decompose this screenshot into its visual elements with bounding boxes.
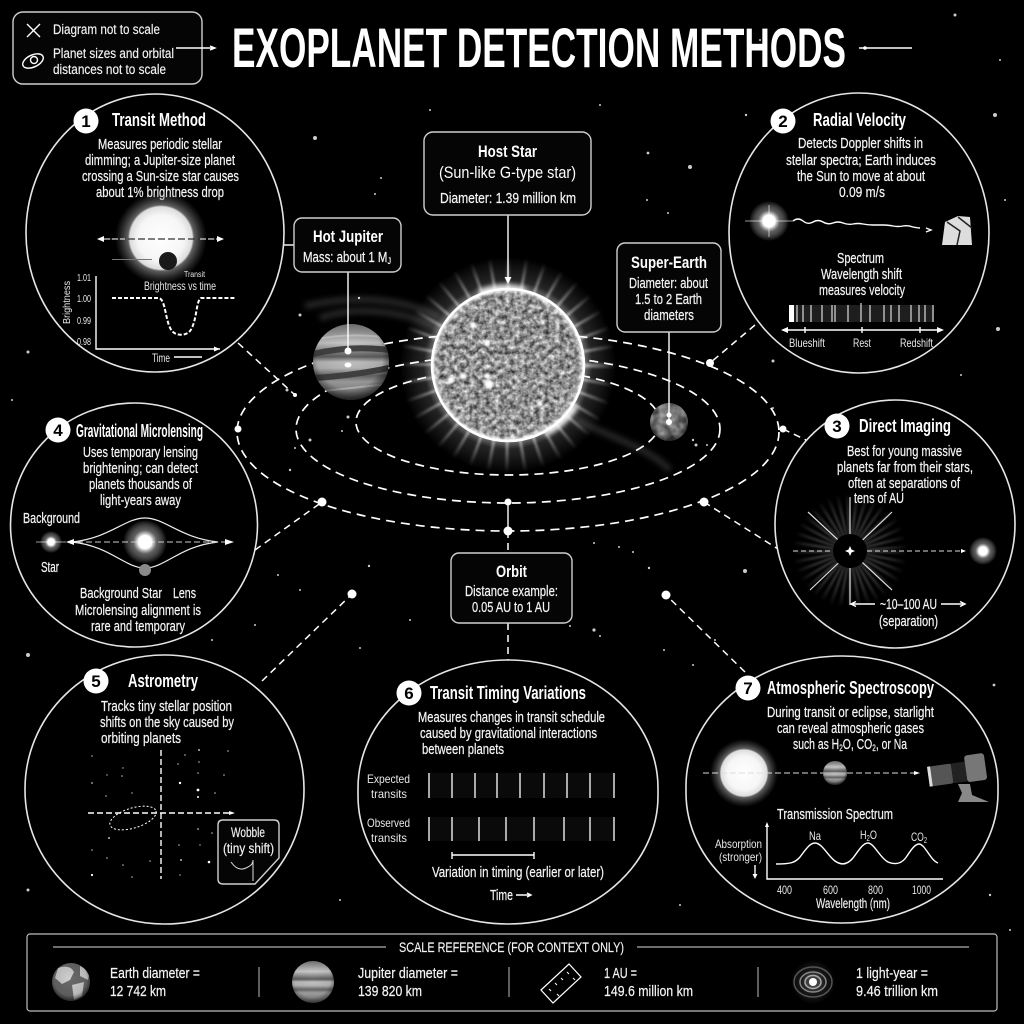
description: Detects Doppler shifts in <box>798 136 923 152</box>
description: planets thousands of <box>89 477 193 493</box>
description <box>786 136 936 201</box>
description: often at separations of <box>848 476 961 492</box>
transmission spectrum chart: CO <box>911 830 929 844</box>
transmission spectrum chart: H <box>860 828 869 842</box>
description: brightening; can detect <box>83 461 198 477</box>
description: about 1% brightness drop <box>96 185 224 201</box>
description: Measures changes in transit schedule <box>418 710 605 726</box>
wavelength axis <box>781 327 944 350</box>
description: planets far from their stars, <box>837 460 973 476</box>
wobble callout: (tiny shift) <box>223 841 274 856</box>
description: crossing a Sun-size star causes <box>82 169 239 185</box>
transmission spectrum chart: 2 <box>924 836 927 845</box>
wobble callout <box>218 820 279 884</box>
transmission spectrum chart: Wavelength (nm) <box>816 896 890 911</box>
arrow: legend to title <box>176 46 215 50</box>
separation label: ~10–100 AU <box>880 597 937 613</box>
description <box>82 137 239 201</box>
transmission spectrum chart: 400 <box>777 883 792 897</box>
callout: hot jupiter: Mass: about 1 M <box>303 250 410 266</box>
callout: super-earth <box>617 243 721 332</box>
legend line 1: Diagram not to scale <box>53 22 160 37</box>
orbit ellipses <box>237 333 779 531</box>
badge 7: 7 <box>743 679 753 698</box>
wave arrow <box>793 219 931 232</box>
spectrum text: measures velocity <box>819 283 906 299</box>
light-year: 1 light-year = <box>856 966 928 982</box>
description: O, CO <box>843 737 872 753</box>
description: 0.09 m/s <box>839 185 885 201</box>
wavelength axis: Blueshift <box>789 336 826 350</box>
light curve chart: 1.01 <box>77 273 91 284</box>
badge 4 <box>46 418 70 442</box>
legend line 3: distances not to scale <box>53 62 166 77</box>
coronagraph star <box>793 497 966 605</box>
icon: scale arrows <box>27 24 40 37</box>
icon: jupiter <box>292 961 334 1003</box>
scale heading: SCALE REFERENCE (FOR CONTEXT ONLY) <box>399 939 624 955</box>
description: such as H <box>793 737 857 753</box>
lens labels <box>75 586 201 635</box>
callout: hot jupiter: Hot Jupiter <box>313 227 383 246</box>
icon: ruler <box>541 964 581 1003</box>
icon: telescope <box>942 216 972 245</box>
panel 3: direct imaging <box>775 400 1015 648</box>
panel 5: astrometry <box>25 655 304 924</box>
wavelength axis: Redshift <box>900 336 933 350</box>
lensing diagram <box>66 518 234 576</box>
spectrum text <box>819 251 906 299</box>
wavelength axis: Rest <box>853 336 871 350</box>
lens labels: Lens <box>173 586 196 602</box>
description: Measures periodic stellar <box>98 137 222 153</box>
heading: Transit Timing Variations <box>430 683 586 703</box>
spectrum text: Wavelength shift <box>821 267 902 283</box>
badge 2 <box>770 108 796 134</box>
timing labels: Variation in timing (earlier or later) <box>432 865 604 881</box>
timing labels: Time <box>490 888 513 904</box>
background star <box>23 511 80 576</box>
description: 2 <box>872 743 876 753</box>
description: orbiting planets <box>101 731 181 747</box>
callout: host star: Diameter: 1.39 million km <box>440 191 576 207</box>
earth diameter: Earth diameter = <box>110 966 200 982</box>
leader lines with planet markers <box>344 215 672 425</box>
super-earth planet <box>650 403 688 441</box>
astronomical unit: 149.6 million km <box>604 984 693 1000</box>
badge 6 <box>396 680 422 706</box>
panel 2: radial velocity <box>729 93 989 373</box>
light curve chart: 1.00 <box>77 294 91 305</box>
transmission spectrum chart: O <box>870 828 877 842</box>
jupiter diameter: Jupiter diameter = <box>358 966 458 982</box>
badge 1 <box>74 108 98 134</box>
badge 5 <box>84 668 108 694</box>
icon: spiral galaxy <box>791 960 835 1004</box>
description: Tracks tiny stellar position <box>101 699 232 715</box>
description <box>100 699 235 747</box>
axes and wobble orbit <box>88 750 235 879</box>
jupiter diameter <box>358 966 458 1000</box>
transmission spectrum chart: 1000 <box>912 883 931 897</box>
badge 7 <box>736 676 760 700</box>
callout: host star: Host Star <box>478 142 537 161</box>
callout: super-earth: Super-Earth <box>631 253 707 272</box>
panel: scale reference <box>27 934 997 1011</box>
light curve chart: Brightness <box>62 281 73 324</box>
lens labels: Background Star <box>80 586 162 602</box>
transmission spectrum chart: 800 <box>868 883 883 897</box>
callout: orbit: Distance example: <box>465 584 558 600</box>
astronomical unit: 1 AU = <box>604 966 637 982</box>
description: stellar spectra; Earth induces <box>786 153 936 169</box>
panel 1: transit method <box>26 94 284 372</box>
heading: Astrometry <box>128 671 198 691</box>
panel 7: atmospheric spectroscopy <box>686 656 998 923</box>
description: light-years away <box>100 493 182 509</box>
callout: host star <box>424 132 591 215</box>
spectrum text: Spectrum <box>837 251 884 267</box>
light curve chart <box>62 270 236 365</box>
wobble callout: Wobble <box>231 825 265 840</box>
panel 6: transit timing variations <box>358 660 658 924</box>
icon: telescope <box>926 753 989 802</box>
lens labels: rare and temporary <box>91 619 186 635</box>
description: , or Na <box>876 737 908 753</box>
light curve chart: Brightness vs time <box>144 279 216 293</box>
badge 5: 5 <box>91 672 101 691</box>
transmission spectrum chart <box>715 807 943 911</box>
heading: Radial Velocity <box>813 110 906 130</box>
earth diameter <box>110 966 200 1000</box>
spectrum bar <box>789 303 934 322</box>
description: Best for young massive <box>847 444 962 460</box>
description <box>418 710 605 758</box>
heading: Atmospheric Spectroscopy <box>767 678 934 698</box>
astronomical unit <box>604 966 693 1000</box>
transmission spectrum chart: 2 <box>867 834 870 843</box>
legend line 2: Planet sizes and orbital <box>53 46 174 61</box>
description <box>837 444 973 507</box>
icon: earth <box>52 963 90 1001</box>
star <box>745 201 793 241</box>
separation label: (separation) <box>879 614 938 630</box>
description: the Sun to move at about <box>797 169 925 185</box>
callout: orbit: 0.05 AU to 1 AU <box>472 600 550 616</box>
hot jupiter planet <box>313 324 389 400</box>
description: Uses temporary lensing <box>83 445 198 461</box>
jupiter diameter: 139 820 km <box>358 984 422 1000</box>
transit illustration <box>97 192 224 284</box>
heading: Gravitational Microlensing <box>76 421 203 441</box>
callout: host star: (Sun-like G-type star) <box>439 163 576 182</box>
badge 1: 1 <box>81 112 91 131</box>
light curve chart: 0.99 <box>77 316 91 327</box>
variation bracket <box>452 852 534 859</box>
title ornament <box>859 46 912 50</box>
observed transits row <box>367 816 614 845</box>
host star <box>305 257 670 473</box>
transmission spectrum chart: Absorption <box>715 837 762 851</box>
badge 3: 3 <box>832 417 842 436</box>
description <box>767 705 934 753</box>
transmission spectrum chart: Transmission Spectrum <box>777 807 893 823</box>
earth diameter: 12 742 km <box>110 984 166 1000</box>
observed transits row: transits <box>371 831 407 845</box>
transmission spectrum chart: (stronger) <box>719 850 762 864</box>
companion planet <box>969 537 997 565</box>
description: dimming; a Jupiter-size planet <box>85 153 235 169</box>
callout: orbit <box>451 553 572 623</box>
light-year: 9.46 trillion km <box>856 984 938 1000</box>
separation label <box>851 597 965 630</box>
background star: Star <box>41 560 59 576</box>
lens labels: Microlensing alignment is <box>75 603 201 619</box>
expected transits row: transits <box>371 787 407 801</box>
orbit marker dots <box>234 359 786 600</box>
description: During transit or eclipse, starlight <box>767 705 934 721</box>
heading: Transit Method <box>112 110 206 130</box>
transmission spectrum chart: 600 <box>823 883 838 897</box>
callout: orbit: Orbit <box>496 562 527 581</box>
icon: orbit <box>20 51 46 71</box>
callout: hot jupiter: J <box>387 256 391 266</box>
star field <box>91 749 229 878</box>
description: can reveal atmospheric gases <box>777 721 924 737</box>
badge 6: 6 <box>404 684 414 703</box>
star, planet, line of sight <box>703 739 920 807</box>
light-year <box>856 966 938 1000</box>
expected transits row: Expected <box>367 772 410 786</box>
description: tens of AU <box>854 491 904 507</box>
light curve chart: 0.98 <box>77 337 91 348</box>
observed transits row: Observed <box>367 816 410 830</box>
description: between planets <box>422 742 504 758</box>
callout: super-earth: diameters <box>644 308 694 324</box>
badge 3 <box>824 414 850 438</box>
connector lines <box>238 245 806 681</box>
badge 4: 4 <box>53 421 63 440</box>
legend box <box>13 12 202 84</box>
expected transits row <box>367 772 614 801</box>
panel 4: gravitational microlensing <box>10 403 258 647</box>
callout: super-earth: Diameter: about <box>629 276 708 292</box>
light curve chart: Transit <box>184 270 206 279</box>
description <box>83 445 198 509</box>
light curve chart: Time <box>152 351 170 365</box>
description: 2 <box>839 743 843 753</box>
background star: Background <box>23 511 80 527</box>
transmission spectrum chart: Na <box>809 829 821 843</box>
callout: hot jupiter <box>294 218 401 272</box>
callout: super-earth: 1.5 to 2 Earth <box>635 292 702 308</box>
timing labels <box>432 865 604 904</box>
description: caused by gravitational interactions <box>420 726 597 742</box>
badge 2: 2 <box>778 112 788 131</box>
description: shifts on the sky caused by <box>100 715 235 731</box>
heading: Direct Imaging <box>859 416 951 436</box>
